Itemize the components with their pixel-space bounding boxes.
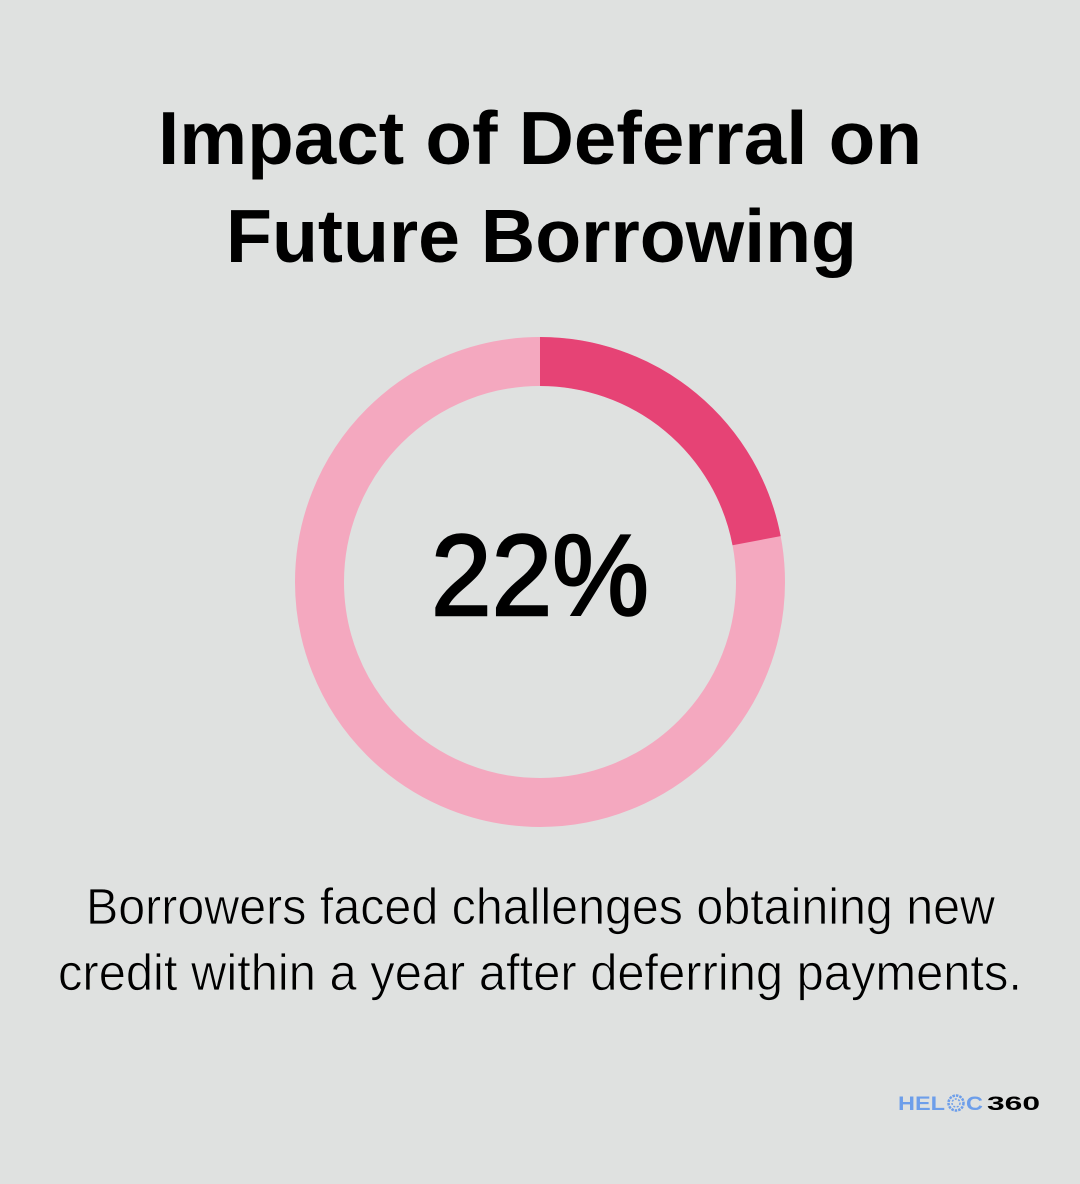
donut value: 22% xyxy=(431,512,649,640)
logo: HELOC360: 360 xyxy=(987,1094,1040,1115)
logo: HELOC360: C xyxy=(966,1094,983,1115)
logo: HELOC360 xyxy=(898,1094,1040,1115)
logo: HELOC360: HEL xyxy=(898,1094,945,1115)
title xyxy=(158,96,922,278)
icon: logo swirl xyxy=(948,1096,964,1110)
description: credit within a year after deferring payments. xyxy=(58,944,1022,1001)
title: Future Borrowing xyxy=(226,194,857,278)
description xyxy=(58,878,1022,1001)
title: Impact of Deferral on xyxy=(158,96,922,180)
donut chart: 22% xyxy=(320,362,760,802)
description: Borrowers faced challenges obtaining new xyxy=(86,878,995,935)
